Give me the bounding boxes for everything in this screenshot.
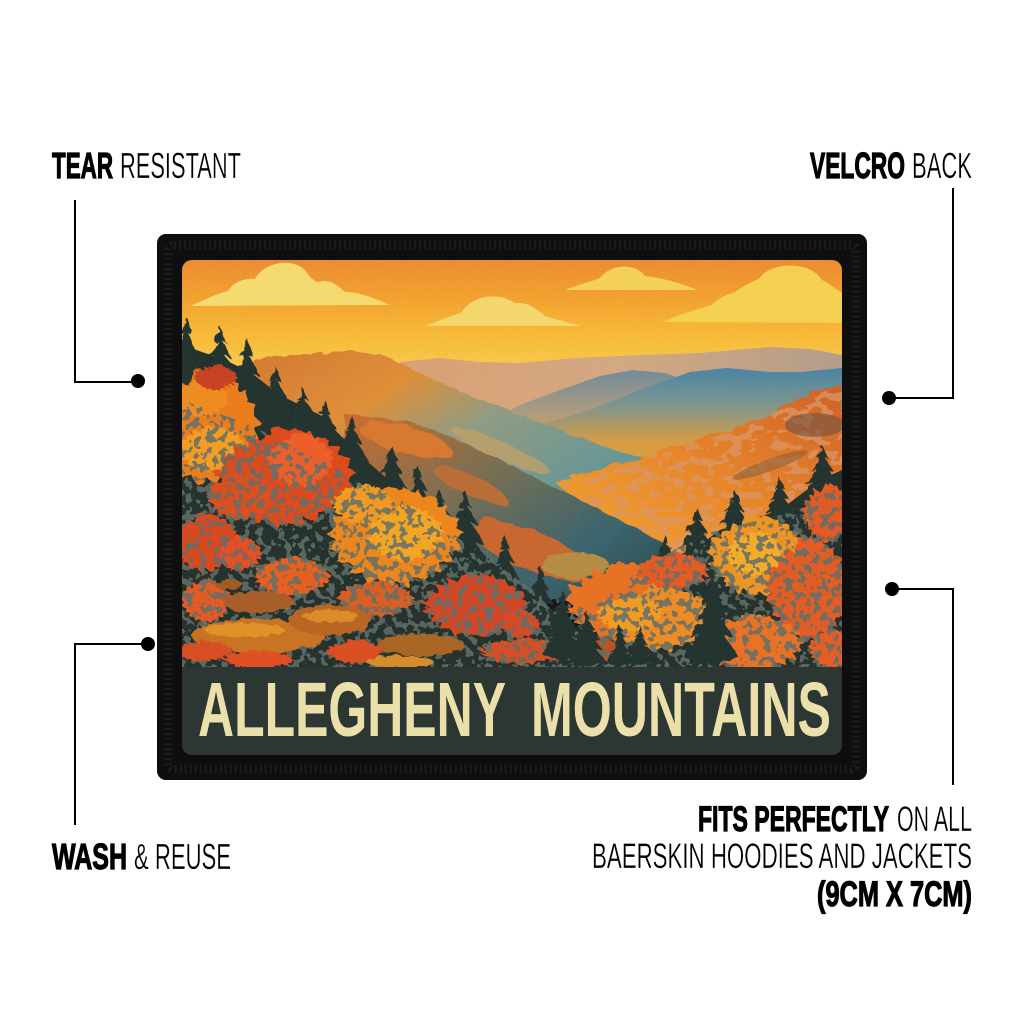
sky <box>182 260 842 366</box>
label: fits perfectly <box>592 800 972 914</box>
label: tear resistant <box>52 145 241 186</box>
label: fits perfectly: ON ALL <box>897 800 972 839</box>
rear blue ridge <box>509 370 676 424</box>
clouds <box>190 263 842 326</box>
label: wash and reuse: WASH <box>52 836 127 877</box>
scattered dark leaf gaps <box>182 400 842 667</box>
leader line: fits perfectly <box>885 582 953 785</box>
callout: tear resistant <box>52 145 241 388</box>
far ridge <box>400 347 842 410</box>
foreground dark forest <box>182 345 842 670</box>
rocks <box>192 580 464 668</box>
label: wash and reuse <box>52 836 231 877</box>
foreground red leaves <box>175 639 385 669</box>
slope tree patches <box>562 390 842 554</box>
right orange slope <box>555 383 842 560</box>
title text: ALLEGHENY <box>198 667 506 753</box>
patch border <box>157 234 867 780</box>
leader line: wash and reuse <box>75 637 155 825</box>
label: wash and reuse: & REUSE <box>134 836 231 877</box>
callout: fits perfectly <box>592 582 972 914</box>
title text: MOUNTAINS <box>531 667 831 753</box>
patch <box>149 234 867 780</box>
label: tear resistant: TEAR <box>52 145 113 186</box>
label: velcro back: VELCRO <box>810 145 905 186</box>
leader line: tear resistant <box>75 200 145 388</box>
callout: wash and reuse <box>52 637 231 877</box>
front blue ridge <box>544 368 842 464</box>
title text <box>199 682 829 736</box>
title band <box>182 667 842 755</box>
conifer trees <box>182 317 834 606</box>
label: tear resistant: RESISTANT <box>120 145 241 186</box>
left mountain <box>252 350 642 492</box>
callout: velcro back <box>810 145 972 405</box>
fabric grain <box>182 260 842 667</box>
patch artwork <box>149 260 856 755</box>
middle forested slope <box>345 413 672 600</box>
evergreen accents over foliage <box>542 575 740 667</box>
leader line: velcro back <box>882 188 953 405</box>
label: fits perfectly: FITS PERFECTLY <box>698 800 889 839</box>
label: velcro back: BACK <box>912 145 972 186</box>
autumn foliage <box>149 364 856 674</box>
